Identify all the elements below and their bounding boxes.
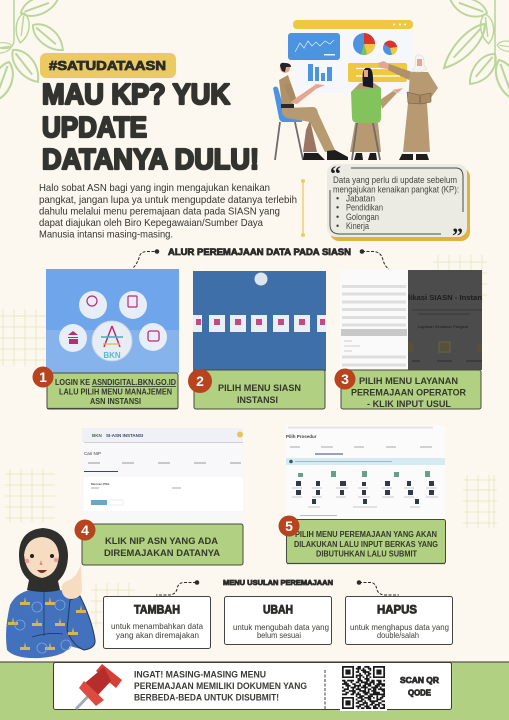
instruction box: LOGIN KE ASNDIGITAL.BKN.GO.ID xyxy=(55,378,176,387)
card: tambah xyxy=(104,596,210,648)
instruction box: LALU PILIH MENU MANAJEMEN xyxy=(59,388,172,396)
number badge 4: 4 xyxy=(81,522,89,538)
title: MAU KP? YUK xyxy=(42,79,230,111)
instruction box: PEREMAJAAN OPERATOR xyxy=(351,388,466,398)
quote box: data to update: Jabatan xyxy=(346,194,375,204)
step 5 panel xyxy=(278,425,446,564)
number badge 3 xyxy=(334,368,356,390)
card: ubah: belum sesuai xyxy=(257,630,301,640)
screenshot: BKN portal: BKN xyxy=(103,351,121,360)
instruction box xyxy=(194,370,325,409)
scan label: SCAN QR xyxy=(400,675,439,685)
standing woman in hijab xyxy=(378,55,438,160)
card: hapus: untuk menghapus data yang xyxy=(350,622,449,632)
illustration: three civil servants with data board xyxy=(273,20,438,160)
icon: red push pin xyxy=(76,664,122,709)
quote box: data to update: • xyxy=(336,202,339,212)
intro paragraph xyxy=(39,182,297,240)
reminder card: INGAT! MASING-MASING MENU xyxy=(134,670,266,680)
card: hapus: HAPUS xyxy=(377,602,417,616)
step 2 panel xyxy=(188,271,326,409)
instruction box: DIREMAJAKAN DATANYA xyxy=(104,548,220,559)
instruction box: PILIH MENU PEREMAJAAN YANG AKAN xyxy=(295,530,437,539)
instruction box xyxy=(286,520,446,564)
number badge 1 xyxy=(32,366,54,388)
intro paragraph: dapat diajukan oleh Biro Kepegawaian/Sumber Daya xyxy=(39,217,263,229)
instruction box: DIBUTUHKAN LALU SUBMIT xyxy=(316,550,417,558)
card: ubah: UBAH xyxy=(263,602,293,616)
section heading: alur peremajaan xyxy=(133,247,389,269)
card: tambah: TAMBAH xyxy=(134,602,180,616)
instruction box: - KLIK INPUT USUL xyxy=(367,399,451,410)
hijab xyxy=(19,528,68,592)
scan label: QODE xyxy=(408,688,431,698)
screenshot: cari NIP: Mencari PNS xyxy=(91,482,109,486)
instruction box xyxy=(82,524,243,565)
vertical gold divider xyxy=(301,179,305,237)
data board xyxy=(288,20,413,94)
step 1 panel xyxy=(32,269,179,409)
section heading: menu usulan peremajaan xyxy=(156,578,399,595)
number badge 2: 2 xyxy=(196,373,204,389)
decorative leaf branch: top left xyxy=(0,0,69,105)
intro paragraph: dahulu melalui menu peremajaan data pada SIASN yang xyxy=(39,206,280,218)
intro paragraph: Halo sobat ASN bagi yang ingin mengajukan kenaikan xyxy=(39,182,270,194)
step 3 panel xyxy=(334,270,482,410)
screenshot: pilih prosedur xyxy=(286,425,445,520)
card: ubah xyxy=(224,596,332,644)
step 4 panel xyxy=(74,428,243,565)
card: tambah: untuk menambahkan data xyxy=(111,621,203,631)
reminder card xyxy=(54,662,452,710)
quote box: data to update xyxy=(327,161,470,248)
hashtag tag: #SATUDATAASN xyxy=(49,58,166,73)
quote box: data to update: Data yang perlu di update sebelum xyxy=(333,175,457,185)
QR code xyxy=(340,664,387,711)
quote box: data to update: • xyxy=(336,212,339,222)
title xyxy=(42,79,259,176)
card: hapus xyxy=(346,596,452,644)
instruction box xyxy=(341,370,481,410)
quote box: data to update: • xyxy=(336,221,339,231)
title: DATANYA DULU! xyxy=(42,144,259,176)
screenshot: BKN portal xyxy=(46,269,179,373)
intro paragraph: Manusia intansi masing-masing. xyxy=(39,228,173,240)
pointing hand xyxy=(62,565,82,599)
number badge 4 xyxy=(74,520,96,540)
quote box: data to update: mengajukan kenaikan pangkat (KP): xyxy=(333,184,459,194)
seated man with blue chair xyxy=(273,63,348,160)
screenshot: layanan menu: likasi SIASN - Instan xyxy=(408,293,482,302)
footer band xyxy=(0,662,509,720)
screenshot: SIASN menu xyxy=(193,271,326,371)
instruction box xyxy=(47,373,178,409)
screenshot: pilih prosedur: Pilih Prosedur xyxy=(286,434,317,439)
scan label xyxy=(400,675,439,698)
card: ubah: untuk mengubah data yang xyxy=(233,622,329,632)
hashtag tag xyxy=(40,53,176,78)
quote box: data to update: Kinerja xyxy=(346,221,369,231)
screenshot: layanan menu: Layanan Kenaikan Pangkat xyxy=(418,324,469,329)
decorative grids xyxy=(0,255,497,627)
instruction box: INSTANSI xyxy=(237,395,278,406)
instruction box: DILAKUKAN LALU INPUT BERKAS YANG xyxy=(294,540,438,549)
character: woman in hijab pointing up xyxy=(6,528,95,658)
title: UPDATE xyxy=(42,112,147,144)
face xyxy=(24,537,59,578)
number badge 5: 5 xyxy=(285,518,293,534)
instruction box: PILIH MENU SIASN xyxy=(218,383,301,394)
number badge 5 xyxy=(278,516,300,536)
quote box: data to update: Pendidikan xyxy=(346,202,383,212)
screenshot: cari NIP: BKN xyxy=(92,433,102,438)
screenshot: cari NIP: SI-ASN INSTANSI xyxy=(106,433,143,438)
number badge 1: 1 xyxy=(39,369,47,385)
section heading: menu usulan peremajaan: MENU USULAN PEREMAJAAN xyxy=(223,578,333,587)
screenshot: cari NIP xyxy=(82,428,243,523)
intro paragraph: pangkat, jangan lupa ya untuk mengupdate datanya terlebih xyxy=(39,194,297,206)
decorative leaf branch: top right xyxy=(438,0,509,102)
instruction box: PILIH MENU LAYANAN xyxy=(359,376,458,387)
instruction box: KLIK NIP ASN YANG ADA xyxy=(105,536,218,547)
number badge 3: 3 xyxy=(341,371,349,387)
section heading: alur peremajaan: ALUR PEREMAJAAN DATA PADA SIASN xyxy=(168,247,351,258)
quote box: data to update: “ xyxy=(330,161,341,186)
seated woman with green chair xyxy=(350,68,403,160)
screenshot: layanan menu xyxy=(340,270,482,370)
reminder card: BERBEDA-BEDA UNTUK DISUBMIT! xyxy=(134,692,279,704)
quote box: data to update: Golongan xyxy=(346,212,379,222)
screenshot: cari NIP: Cari NIP xyxy=(84,451,101,456)
card: hapus: double/salah xyxy=(377,630,419,640)
reminder card: PEREMAJAAN MEMILIKI DOKUMEN YANG xyxy=(134,681,307,692)
body with batik xyxy=(6,590,95,658)
quote box: data to update: • xyxy=(336,194,339,204)
instruction box: ASN INSTANSI xyxy=(90,397,141,406)
card: tambah: yang akan diremajakan xyxy=(116,630,199,640)
quote box: data to update: ” xyxy=(452,223,463,248)
